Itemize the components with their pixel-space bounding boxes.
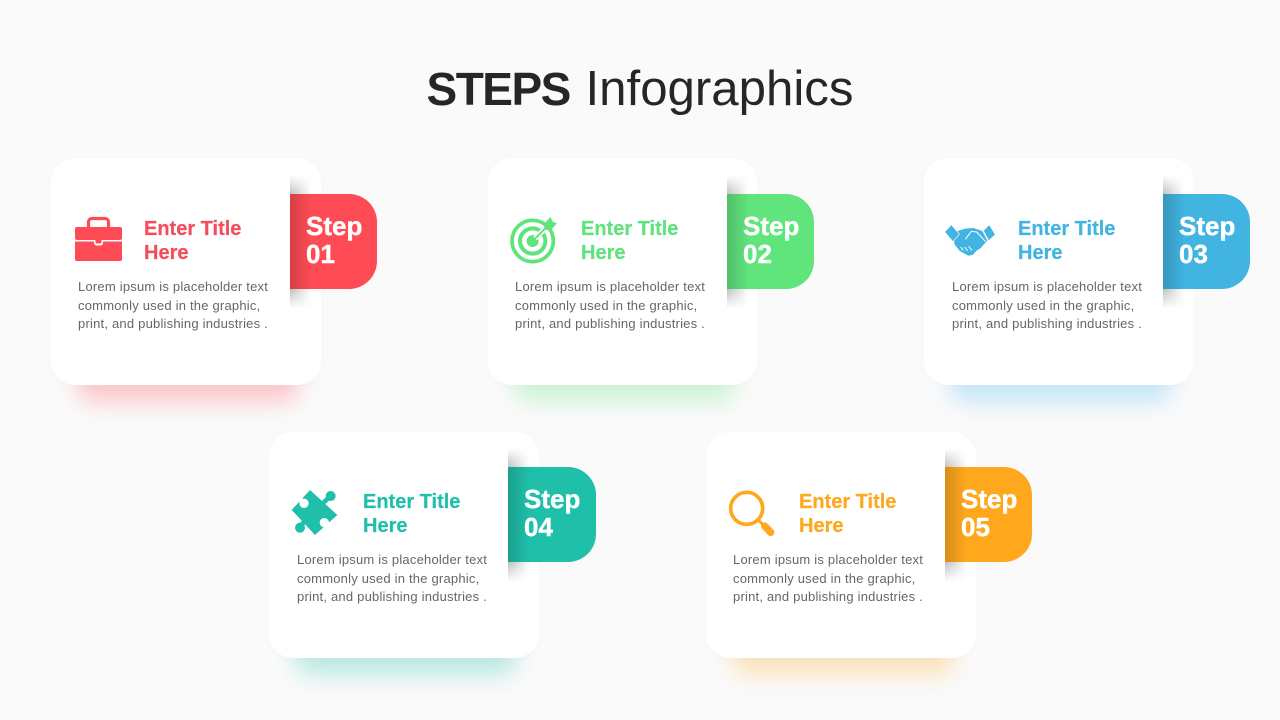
step 02 text [515,279,705,331]
step 01 text: Lorem ipsum is placeholder text [78,279,268,294]
step 05 heading: Enter Title [799,491,896,513]
icon: handshake [945,225,995,256]
step 04 text: Lorem ipsum is placeholder text [297,552,487,567]
step 05 text: commonly used in the graphic, [733,570,915,586]
icon: magnifier [728,490,774,536]
step 03 text: commonly used in the graphic, [952,298,1134,312]
step 04 tab [508,467,596,562]
step 02 heading [581,218,678,264]
step 02 tab: Step [743,211,799,241]
step 01 tab: Step [306,211,362,241]
step 03 text [952,279,1142,331]
icon: briefcase [75,216,122,261]
step 05 text: print, and publishing industries . [733,589,923,604]
step 03 heading: Here [1018,242,1062,264]
step 05 panel [720,452,1032,688]
step 04 text [297,552,487,604]
step 03 tab: Step [1179,211,1235,241]
step 01 tab: 01 [306,239,335,269]
step 02 tab: 02 [743,239,772,269]
step 03 text: Lorem ipsum is placeholder text [952,279,1142,294]
step 05 heading [799,491,896,536]
step 04 panel [283,452,596,688]
step 04 heading [363,491,460,536]
step 01 text [78,279,268,331]
icon: puzzle piece [292,490,338,535]
step 03 heading [1018,218,1115,264]
step 05 text: Lorem ipsum is placeholder text [733,552,923,567]
step 01 heading: Here [144,242,188,264]
step 04 tab: 04 [524,512,553,542]
step 01 heading: Enter Title [144,218,241,240]
step 05 tab [945,467,1032,562]
step 04 tab: Step [524,484,580,514]
step 04 heading: Enter Title [363,491,460,513]
step 01 panel [66,179,377,413]
step 02 text: commonly used in the graphic, [515,298,697,312]
step 05 text [733,552,923,604]
step 03 tab: 03 [1179,239,1208,269]
step 02 text: Lorem ipsum is placeholder text [515,279,705,294]
step 01 text: print, and publishing industries . [78,316,268,331]
title: STEPS Infographics [427,61,853,116]
step 04 heading: Here [363,514,407,536]
step 04 text: commonly used in the graphic, [297,570,479,586]
step 01 heading [144,218,241,264]
step 05 tab: Step [961,484,1017,514]
step 03 heading: Enter Title [1018,218,1115,240]
step 01 text: commonly used in the graphic, [78,298,260,312]
step 04 text: print, and publishing industries . [297,589,487,604]
step 05 tab: 05 [961,512,990,542]
step 03 text: print, and publishing industries . [952,316,1142,331]
step 02 text: print, and publishing industries . [515,316,705,331]
icon: target [510,217,557,264]
step 02 tab [727,194,814,289]
step 02 panel [505,179,814,412]
step 01 tab [290,194,377,289]
step 05 heading: Here [799,514,843,536]
step 02 heading: Enter Title [581,218,678,240]
step 03 panel [940,179,1250,414]
step 03 tab [1163,194,1250,289]
step 02 heading: Here [581,242,625,264]
